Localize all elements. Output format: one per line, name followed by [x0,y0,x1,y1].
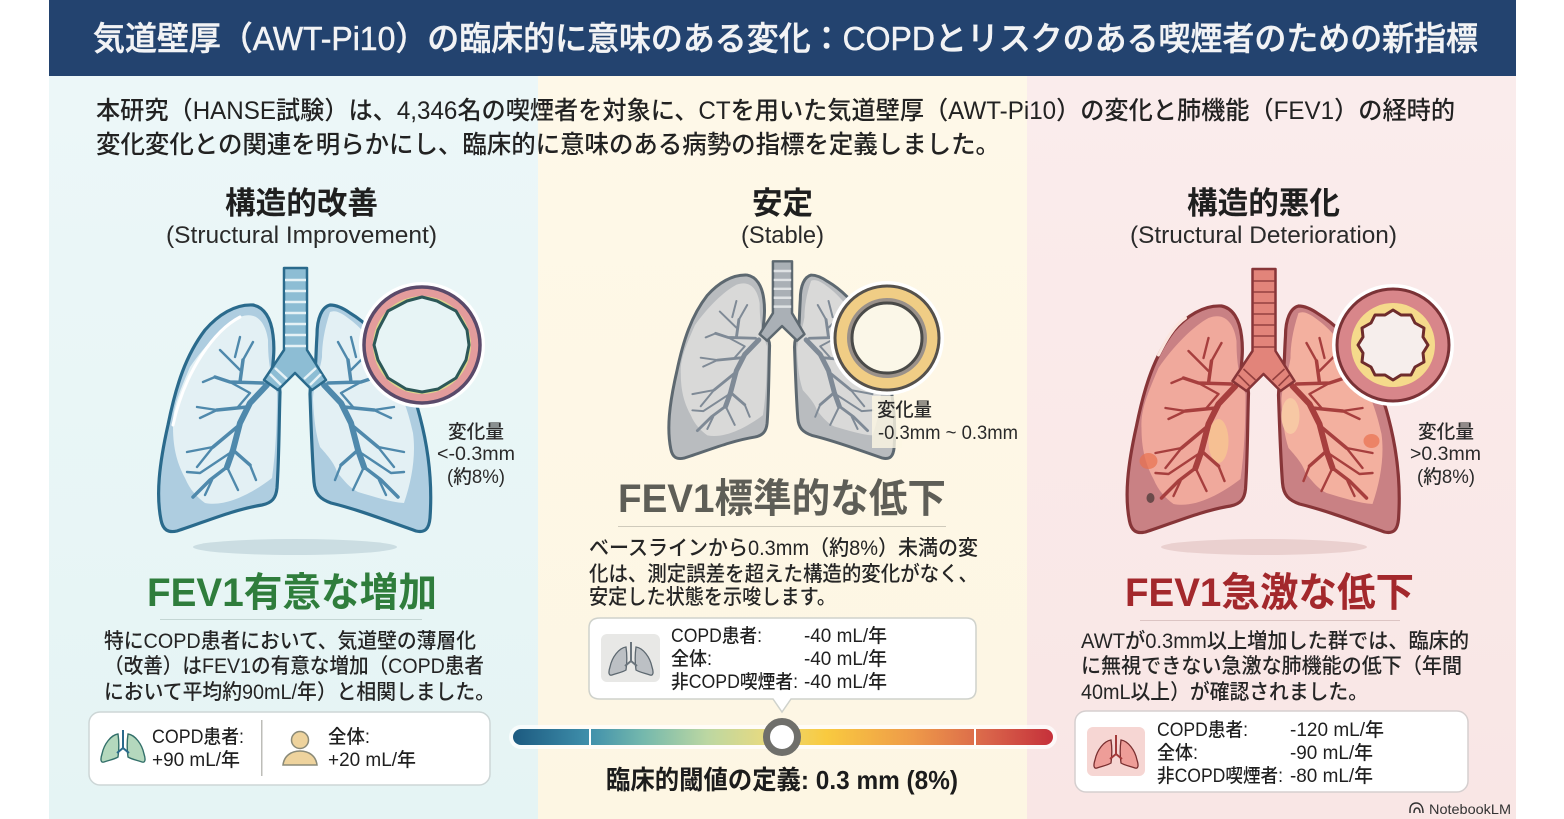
stat box: stable with pointer: -40 mL/年 [804,648,887,670]
text block: stable: 化は、測定誤差を超えた構造的変化がなく、 [589,563,978,586]
text block: improvement: 特にCOPD患者において、気道壁の薄層化 [104,630,476,653]
airway cross-section: normal wall [830,281,944,395]
change label: stable: -0.3mm ~ 0.3mm [878,423,1018,444]
panel: structural deterioration [1027,76,1516,819]
NotebookLM mark: NotebookLM [1429,801,1511,817]
icon: green lungs [101,730,145,762]
illustration: red lungs [1127,269,1399,533]
stat box: improvement [89,712,490,785]
change label: improvement: 変化量 [448,421,504,443]
stat box: improvement: +90 mL/年 [152,749,240,771]
illustration: gray lungs [669,261,895,459]
heading: structural deterioration: 構造的悪化 [1187,186,1340,221]
change label: improvement [437,421,515,488]
result heading: significant increase: FEV1有意な増加 [147,571,437,615]
change label: deterioration: (約8%) [1417,466,1475,488]
stat box: deterioration: 非COPD喫煙者: [1157,765,1283,787]
threshold marker [766,722,798,752]
stat box: stable with pointer: -40 mL/年 [804,625,887,647]
illustration: blue lungs [159,268,431,532]
heading: stable: (Stable) [741,222,824,249]
text block: deterioration: に無視できない急激な肺機能の低下（年間 [1081,655,1462,678]
header band [49,0,1516,76]
change label: deterioration: 変化量 [1418,421,1474,443]
shadow under blue lungs [193,539,397,555]
text block: improvement: において平均約90mL/年）と相関しました。 [104,681,495,704]
stat box: deterioration: -90 mL/年 [1290,742,1373,764]
stat box: deterioration: 全体: [1157,742,1198,764]
airway cross-section: thin wall [359,282,485,408]
heading: structural deterioration [1130,186,1397,249]
text block: stable: ベースラインから0.3mm（約8%）未満の変 [589,537,978,560]
stat box: deterioration: -120 mL/年 [1290,719,1384,741]
stat box: deterioration: -80 mL/年 [1290,765,1373,787]
stat box: stable with pointer: 全体: [671,648,712,670]
intro text: 変化変化との関連を明らかにし、臨床的に意味のある病勢の指標を定義しました。 [96,131,1000,159]
threshold scale bar [509,722,1057,752]
intro text: 本研究（HANSE試験）は、4,346名の喫煙者を対象に、CTを用いた気道壁厚（AWT-Pi10）の変化と肺機能（FEV1）の経時的 [96,97,1455,125]
result heading: standard decline: FEV1標準的な低下 [618,477,946,521]
icon: person [283,732,317,765]
heading: stable: 安定 [752,186,813,221]
heading: structural improvement [166,186,437,249]
change label: stable [872,396,1018,448]
text block: improvement [104,630,495,704]
stat box: improvement: +20 mL/年 [328,749,416,771]
text block: deterioration: AWTが0.3mm以上増加した群では、臨床的 [1081,630,1469,653]
stat box: stable with pointer: 非COPD喫煙者: [671,671,798,693]
title: 気道壁厚（AWT-Pi10）の臨床的に意味のある変化：COPDとリスクのある喫煙者のための新指標 [93,20,1478,57]
stat box: stable with pointer: COPD患者: [671,625,762,647]
change label: improvement: (約8%) [447,466,505,488]
result heading: rapid decline: FEV1急激な低下 [1125,571,1414,615]
change label: deterioration [1410,421,1481,488]
intro text [96,97,1455,159]
heading: structural improvement: 構造的改善 [225,186,378,221]
shadow under red lungs [1161,539,1367,555]
stat box: improvement: COPD患者: [152,726,244,748]
heading: stable [741,186,824,249]
heading: structural deterioration: (Structural Deterioration) [1130,222,1397,249]
stat box: improvement: 全体: [328,726,370,748]
icon: red lungs tile [1087,727,1145,776]
change label: deterioration: >0.3mm [1410,444,1481,465]
stat box: stable with pointer [589,618,976,712]
icon: gray lungs tile [601,634,660,682]
change label: improvement: <-0.3mm [437,444,515,465]
airway cross-section: thick wall [1332,284,1454,406]
text block: improvement: （改善）はFEV1の有意な増加（COPD患者 [104,655,484,678]
threshold label: 臨床的閾値の定義: 0.3 mm (8%) [606,765,958,795]
text block: stable: 安定した状態を示唆します。 [589,586,836,609]
panel: structural improvement [49,76,538,819]
stat box: deterioration: COPD患者: [1157,719,1248,741]
stat box: deterioration [1075,711,1468,792]
text block: deterioration: 40mL以上）が確認されました。 [1081,681,1368,704]
heading: structural improvement: (Structural Improvement) [166,222,437,249]
text block: deterioration [1081,630,1469,704]
stat box: stable with pointer: -40 mL/年 [804,671,887,693]
change label: stable: 変化量 [877,399,932,421]
panel: stable [538,76,1027,819]
text block: stable [589,537,978,609]
